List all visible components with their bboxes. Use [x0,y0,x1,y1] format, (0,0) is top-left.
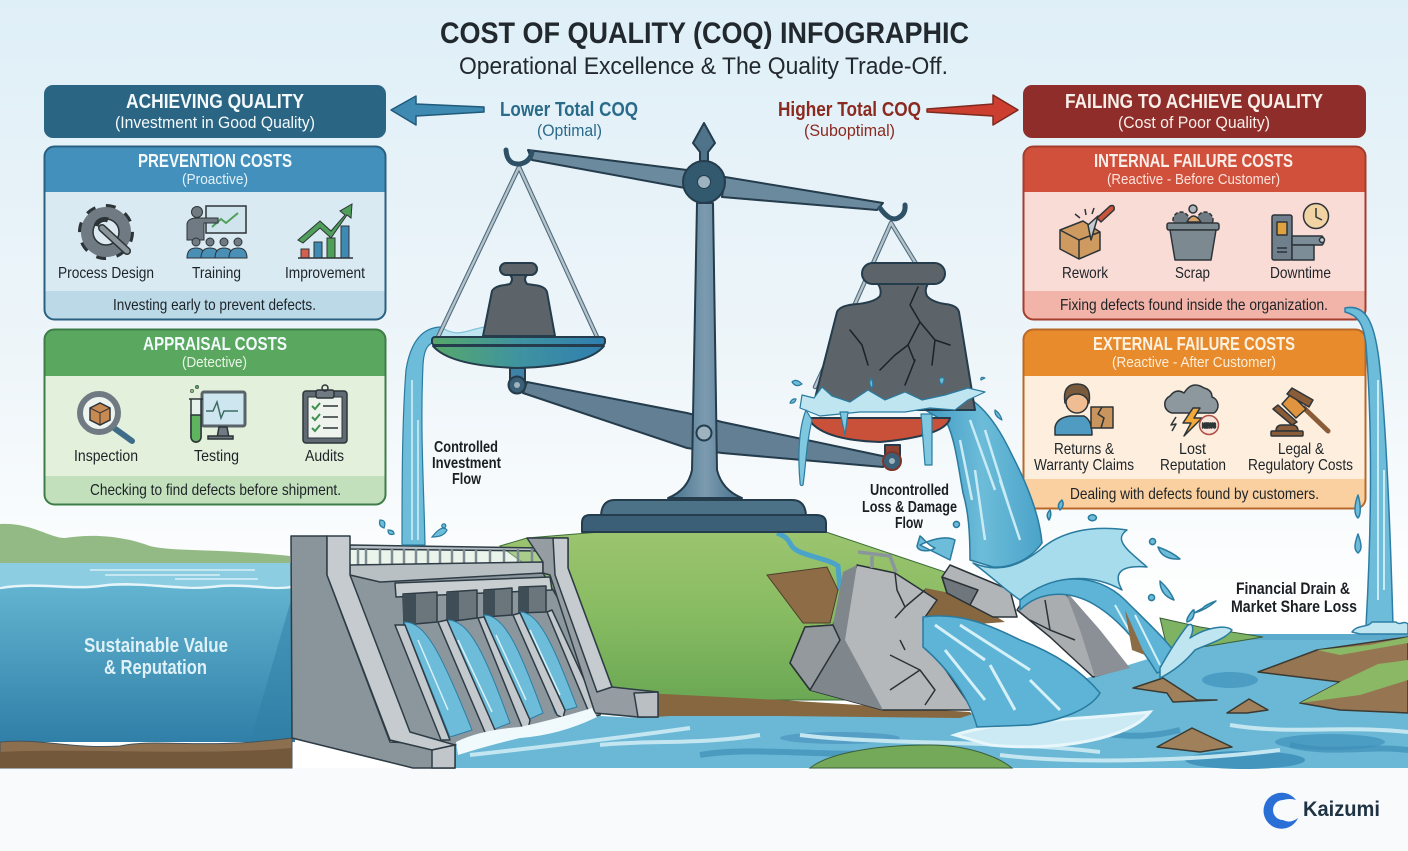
label: financial drain [1231,579,1357,616]
right weight cracked [812,263,975,410]
upper splash crest [973,528,1147,600]
icon: lost reputation storm cloud [1165,385,1218,436]
scale lower beam [523,382,887,467]
label: controlled investment flow: Flow [452,471,481,488]
panel: prevention costs: Training [192,265,241,282]
panel: appraisal costs: (Detective) [182,355,247,371]
label: lower total coq: Lower Total COQ [500,99,638,121]
label: sustainable value: Sustainable Value [84,635,228,657]
panel: prevention costs: PREVENTION COSTS [138,151,292,171]
label: controlled investment flow [432,439,502,488]
scale upper beam [528,150,883,210]
panel: appraisal costs: Inspection [74,448,138,465]
panel: prevention costs: Investing early to prevent defects. [113,297,316,314]
panel: internal failure costs: Fixing defects found inside the organization. [1060,297,1328,314]
panel: external failure costs: Legal & [1278,441,1324,458]
panel: external failure costs [1023,329,1366,509]
illustration: water spilling over right pan [790,377,1002,486]
icon: scrap bin [1167,205,1219,260]
label: financial drain: Financial Drain & [1236,579,1350,598]
panel: external failure costs: Warranty Claims [1034,457,1134,474]
icon: rocks broken dam [790,552,1130,710]
label: uncontrolled loss and damage flow [862,482,957,532]
label: higher total coq: (Suboptimal) [804,121,895,140]
panel: appraisal costs: APPRAISAL COSTS [143,334,287,354]
panel: external failure costs: Regulatory Costs [1248,457,1353,474]
panel: internal failure costs: (Reactive - Before Customer) [1107,172,1280,188]
dam spillway water [404,612,577,737]
label: lower total coq: (Optimal) [537,121,602,140]
panel: internal failure costs [1023,146,1366,320]
panel: appraisal costs: Testing [194,448,239,465]
illustration: river [455,618,1408,769]
right pan [808,418,950,470]
label: higher total coq: Higher Total COQ [778,99,921,121]
label: uncontrolled loss and damage flow: Loss & Damage [862,499,957,516]
label: lower total coq [500,99,638,140]
broken pipe rail [858,552,896,572]
panel: prevention costs [44,146,386,320]
icon: dam [291,536,658,768]
icon: testing monitor and tube [189,385,245,442]
panel: external failure costs: Reputation [1160,457,1226,474]
lower arc of splash [1020,579,1182,673]
icon: gear and wrench [82,208,130,256]
spray right [1160,624,1232,678]
main falling water [922,397,1042,567]
icon: balance scale [432,123,975,532]
dam foam [456,708,597,755]
footer strip [0,768,1408,851]
left weight [483,263,555,336]
label: financial drain: Market Share Loss [1231,597,1357,616]
icon: downtime machine and clock [1272,204,1328,260]
logo: Kaizumi [1264,793,1380,829]
panel: prevention costs: Improvement [285,265,365,282]
panel: external failure costs: (Reactive - After Customer) [1112,355,1276,371]
title: COST OF QUALITY (COQ) INFOGRAPHIC [440,17,969,50]
label: sustainable value [84,635,228,679]
label: controlled investment flow: Investment [432,455,502,472]
panel: prevention costs: Process Design [58,265,154,282]
arrow: left to achieving quality [391,96,484,125]
dam guard rail [350,545,542,565]
label: uncontrolled loss and damage flow: Flow [895,515,923,532]
panel: achieving quality header: ACHIEVING QUALITY [126,91,305,113]
panel: achieving quality header [44,85,386,138]
panel: failing to achieve quality header: FAILING TO ACHIEVE QUALITY [1065,91,1324,113]
arrow: right to failing quality [927,95,1018,125]
illustration: uncontrolled waterfall [917,397,1232,727]
icon: rework box and trowel [1060,206,1114,259]
scale post [668,203,742,498]
scale hub [683,161,725,203]
label: uncontrolled loss and damage flow: Uncontrolled [870,482,949,499]
dam pier strips [395,610,595,740]
icon: legal gavel [1271,388,1328,436]
panel: failing to achieve quality header [1023,85,1366,138]
label: sustainable value: & Reputation [104,657,207,679]
panel: achieving quality header: (Investment in Good Quality) [115,113,315,132]
icon: improvement chart [298,204,353,258]
panel: external failure costs: Returns & [1054,441,1114,458]
panel: external failure costs: Dealing with defects found by customers. [1070,486,1319,503]
illustration: left stream controlled flow [380,327,485,545]
scale hanging strings [438,167,918,387]
icon: returns person with box [1055,384,1113,435]
dam bays [403,586,546,625]
title [440,17,969,80]
illustration: green hill [500,532,1005,728]
illustration: right side stream [1345,307,1408,634]
title: Operational Excellence & The Quality Trade-Off. [459,53,948,80]
panel: external failure costs: Lost [1179,441,1206,458]
icon: training [187,206,247,258]
panel: internal failure costs: Scrap [1175,265,1210,282]
lower burst water [923,616,1100,727]
scale base [582,500,826,532]
island [810,745,1012,768]
illustration: left lake [0,524,295,768]
label: controlled investment flow: Controlled [434,439,498,456]
panel: internal failure costs: Rework [1062,265,1109,282]
panel: failing to achieve quality header: (Cost of Poor Quality) [1118,113,1270,132]
illustration: right bank [1133,637,1408,752]
logo: Kaizumi: Kaizumi [1303,798,1380,821]
panel: internal failure costs: Downtime [1270,265,1331,282]
label: higher total coq [778,99,921,140]
icon: inspection magnifier [80,394,132,441]
panel: internal failure costs: INTERNAL FAILURE COSTS [1094,151,1293,171]
left pan [432,337,605,394]
far green bank [1160,618,1263,652]
panel: prevention costs: (Proactive) [182,172,248,188]
panel: appraisal costs [44,329,386,505]
icon: audits clipboard [303,385,347,443]
panel: external failure costs: EXTERNAL FAILURE COSTS [1093,334,1295,354]
icon: lost reputation storm cloud: NEWS [1202,423,1216,430]
panel: appraisal costs: Audits [305,448,344,465]
panel: appraisal costs: Checking to find defects before shipment. [90,482,341,499]
droplets [917,500,1216,622]
scale finial [693,123,715,162]
